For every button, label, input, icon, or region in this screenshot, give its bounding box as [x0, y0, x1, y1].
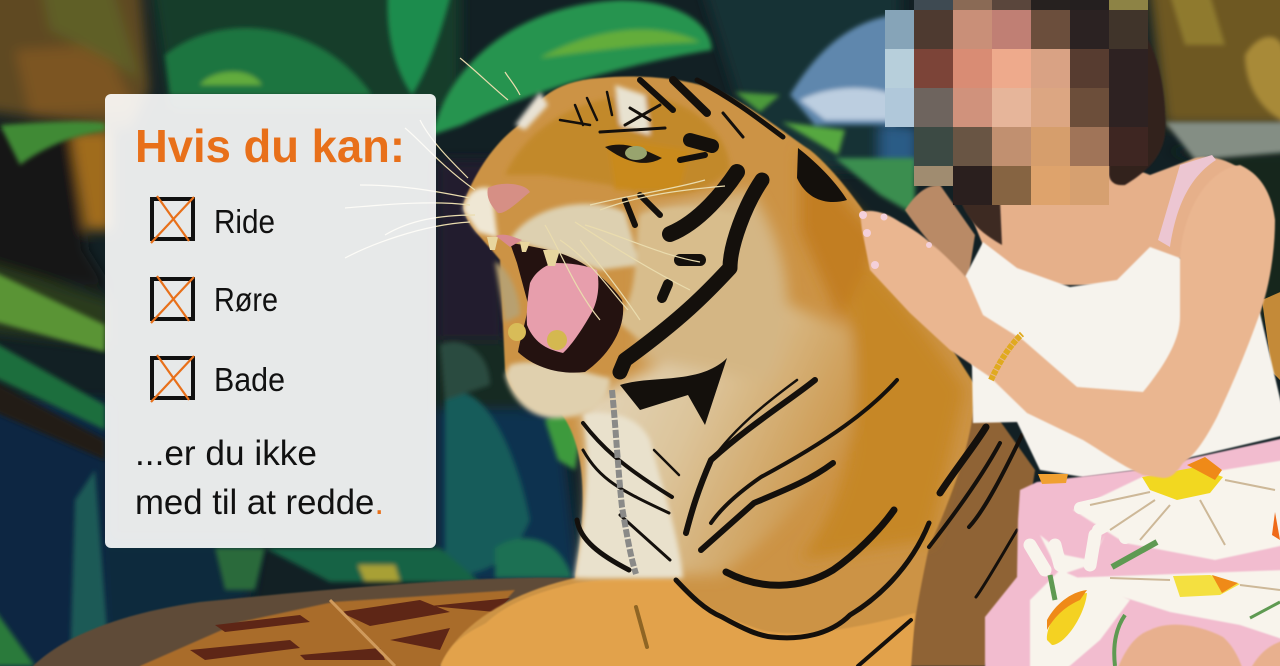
- tiger: chest white: [574, 412, 683, 578]
- closing text: ...er du ikke: [135, 434, 317, 473]
- woman: white top: [965, 242, 1280, 477]
- woman: daisy petals: [1030, 485, 1250, 570]
- tiger: ear: [797, 148, 847, 202]
- woman: tiger behind at right edge: [1262, 290, 1280, 385]
- rock platform: [33, 578, 575, 666]
- checklist item: Røre: Røre: [214, 281, 278, 318]
- icon: crossed checkbox: [151, 276, 194, 323]
- closing text: [135, 434, 384, 522]
- woman: arm: [860, 165, 1275, 478]
- tiger: teeth: [487, 235, 567, 350]
- tiger: [345, 58, 1035, 666]
- woman: petal shading: [1090, 480, 1280, 590]
- woman: far arm: [905, 185, 975, 280]
- tiger: tongue: [527, 263, 598, 353]
- tiger: stripes: [560, 80, 1022, 666]
- woman: daisy petal masses: [1030, 460, 1280, 666]
- chain: [612, 390, 636, 574]
- checklist item: Bade: [151, 355, 285, 402]
- heading: Hvis du kan:: [135, 120, 405, 172]
- tiger: foreleg: [440, 579, 915, 666]
- woman: bracelet: [991, 334, 1022, 380]
- tiger: fur tones: [580, 150, 965, 575]
- icon: crossed checkbox: [151, 355, 194, 402]
- panel background: [105, 94, 436, 548]
- woman: stems: [1050, 542, 1280, 666]
- woman: hair tip: [960, 200, 1002, 245]
- woman: strap: [1158, 155, 1216, 247]
- tiger: nose: [487, 184, 530, 213]
- closing text: med til at redde.: [135, 483, 384, 522]
- tiger: rear dark flank: [905, 400, 1035, 666]
- tiger: mouth: [510, 243, 623, 373]
- checklist item: Ride: [151, 196, 275, 243]
- woman: fingernails: [859, 211, 932, 269]
- checklist item: Røre: [151, 276, 278, 323]
- woman: flower centres: [1038, 457, 1280, 645]
- woman: skirt: [985, 438, 1280, 666]
- tiger: whiskers: [345, 58, 725, 320]
- pixelated face mosaic: [885, 0, 1148, 205]
- checklist item: Ride: Ride: [214, 203, 275, 240]
- woman: hair: [1109, 40, 1165, 185]
- panel: message card: [105, 94, 436, 548]
- woman: leg: [1117, 625, 1280, 666]
- tiger: eye: [605, 145, 662, 163]
- checklist item: Bade: Bade: [214, 361, 285, 398]
- icon: crossed checkbox: [151, 196, 194, 243]
- woman: neck and chest: [950, 157, 1272, 313]
- tiger: body silhouette: [440, 77, 975, 666]
- tiger: neck shadow: [620, 358, 727, 425]
- tiger: head colours: [463, 85, 740, 418]
- woman: [859, 40, 1280, 666]
